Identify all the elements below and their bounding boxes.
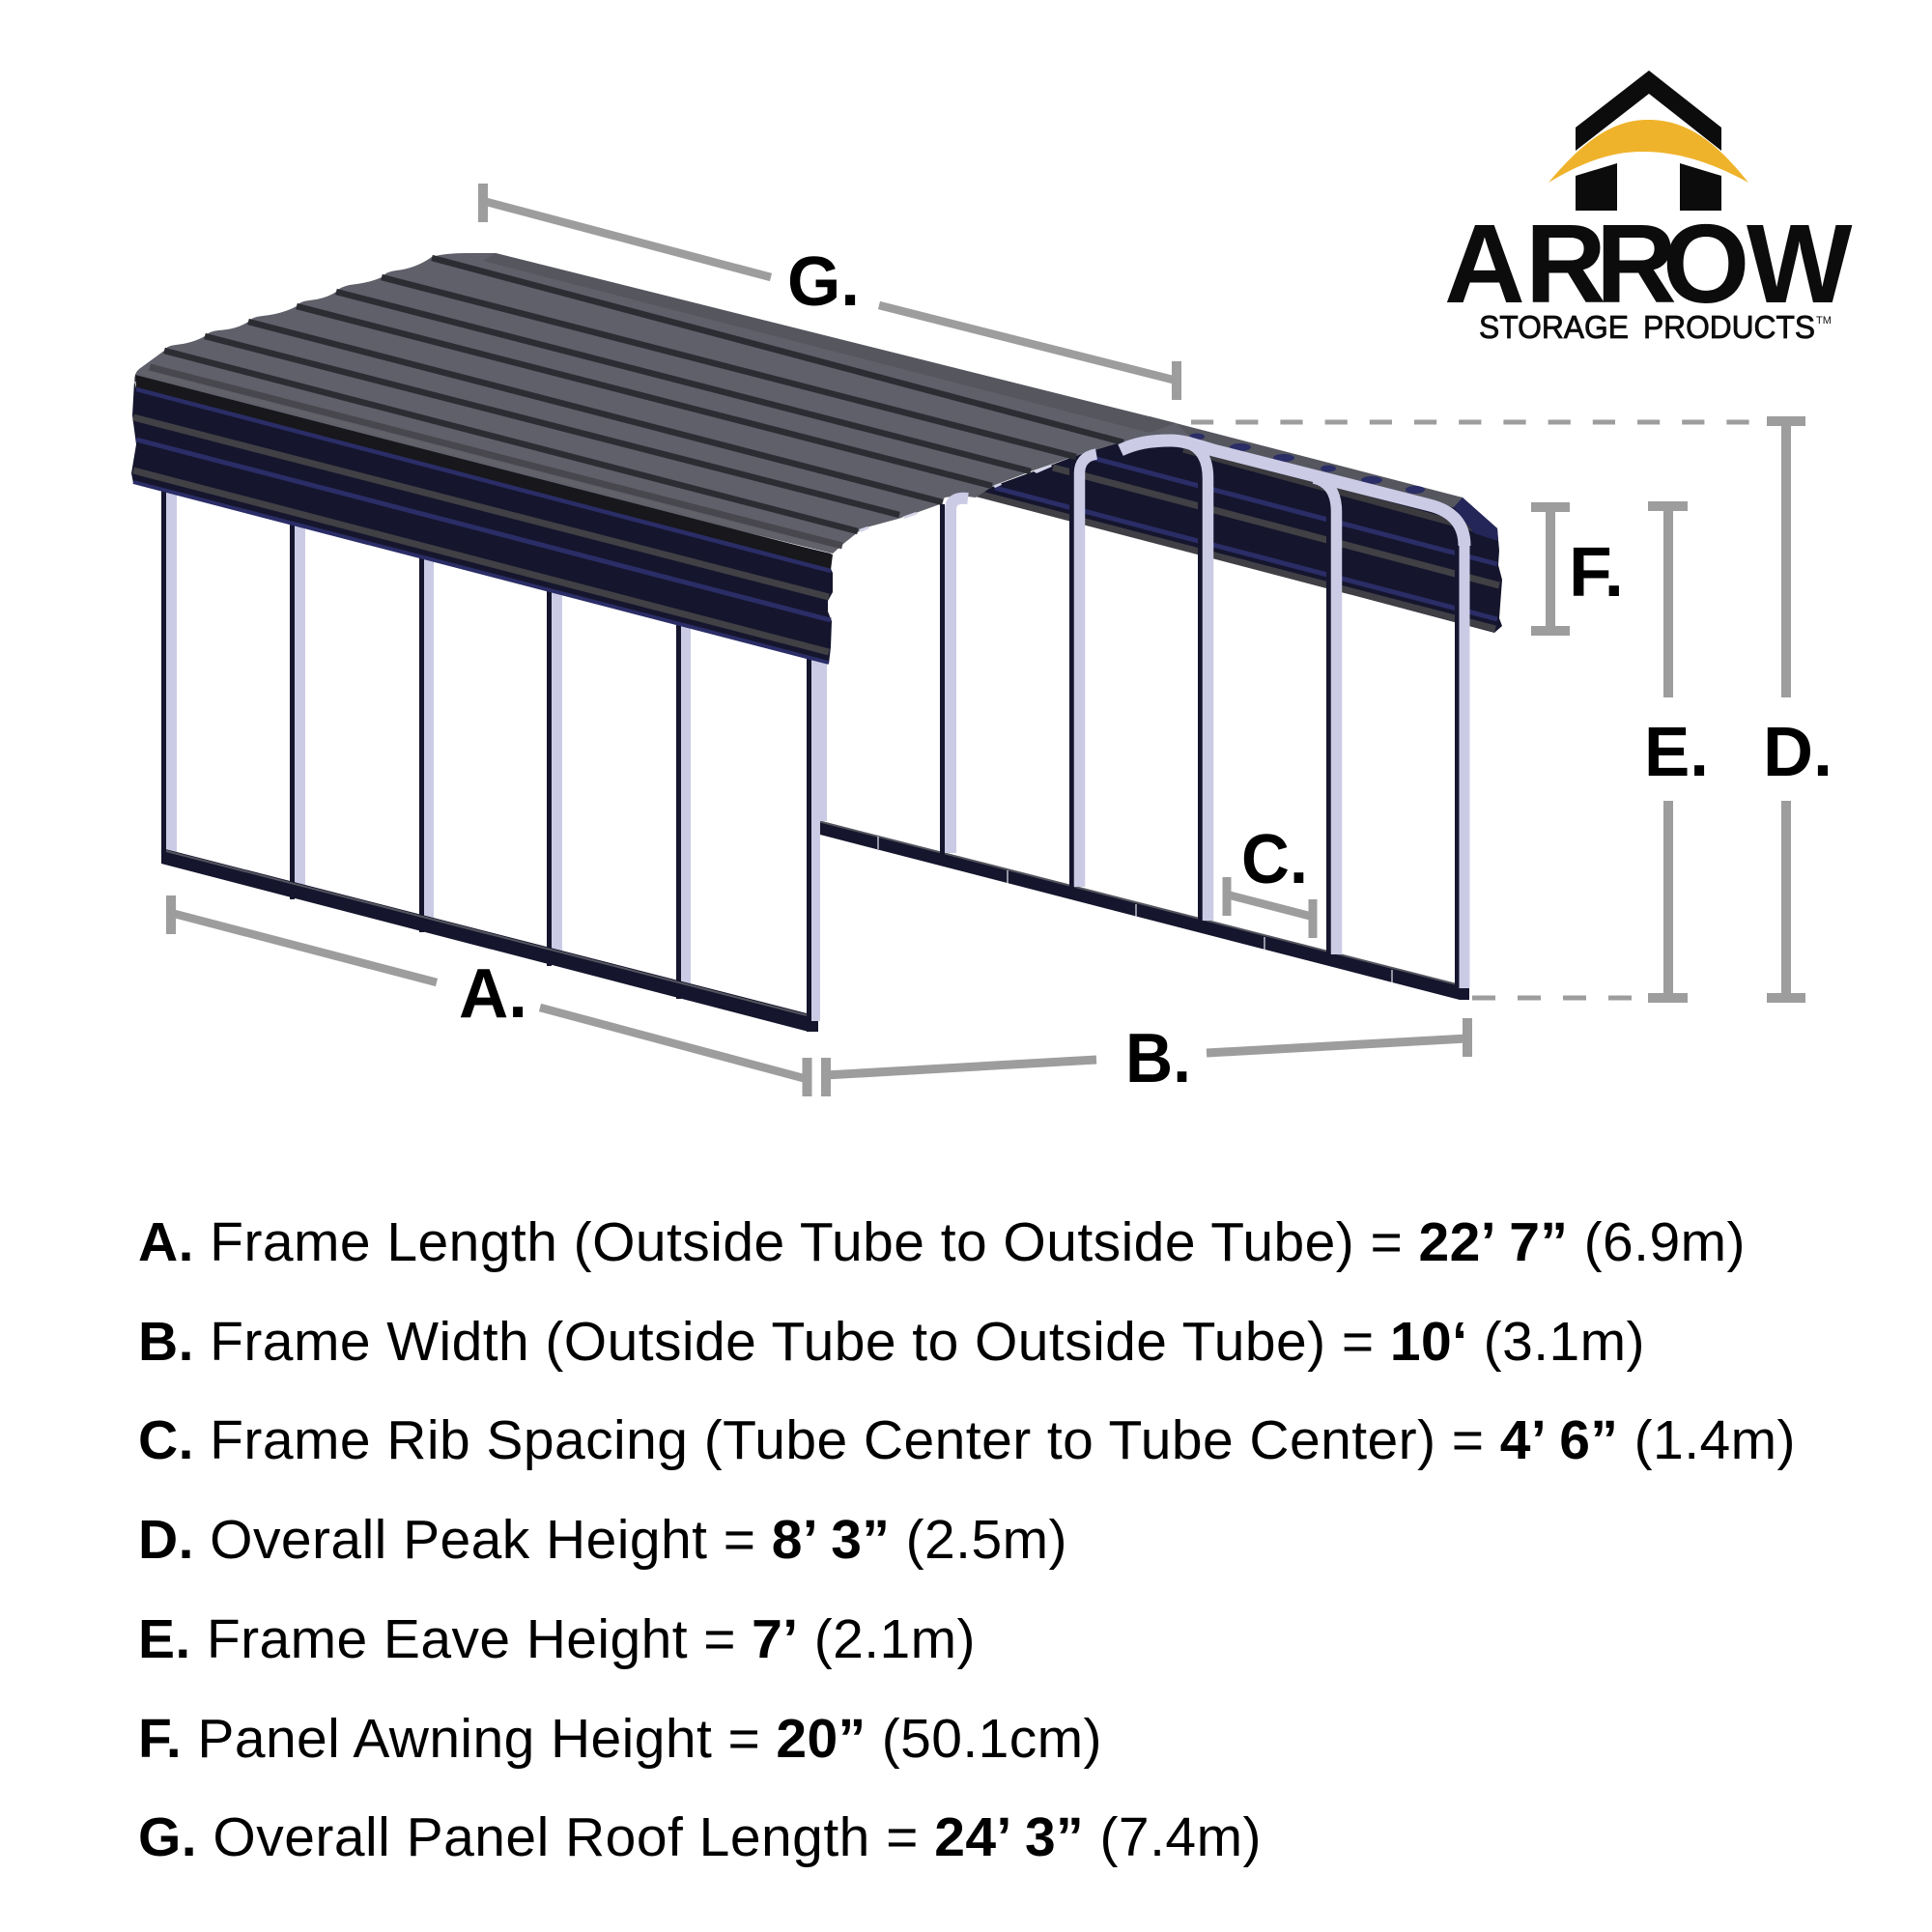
logo: Arrow Storage Products (1444, 71, 1853, 345)
spec C: C. Frame Rib Spacing (Tube Center to Tube Center) = 4’ 6” (1.4m) (138, 1409, 1795, 1471)
carport drawing (131, 253, 1502, 1032)
icon: house roof (1576, 71, 1721, 151)
icon: house left wall (1576, 163, 1617, 211)
front awning panel (131, 375, 833, 664)
icon: yellow arc (1548, 120, 1748, 183)
label G: G. (787, 243, 860, 321)
logo tagline: STORAGE (1479, 309, 1629, 345)
dimension G line (483, 184, 1177, 400)
dimension B line (826, 1018, 1467, 1096)
dashed guide bottom (1472, 995, 1657, 1001)
front sill rail (161, 848, 818, 1032)
logo trademark: TM (1816, 315, 1832, 327)
spec E: E. Frame Eave Height = 7’ (2.1m) (138, 1608, 976, 1670)
dimension D line (1767, 421, 1805, 998)
label F: F. (1569, 534, 1624, 611)
spec A: A. Frame Length (Outside Tube to Outside Tube) = 22’ 7” (6.9m) (138, 1211, 1745, 1273)
dimension F line (1531, 507, 1570, 631)
rear sill rail (820, 821, 1469, 1000)
spec F: F. Panel Awning Height = 20” (50.1cm) (138, 1708, 1101, 1770)
label B: B. (1125, 1020, 1191, 1097)
dimension A line (171, 895, 808, 1096)
corrugated roof (134, 253, 1197, 554)
label A: A. (459, 955, 527, 1033)
logo tagline (1479, 309, 1815, 345)
dimension C line (1227, 877, 1313, 938)
label C: C. (1241, 821, 1308, 898)
dashed guide top (1191, 419, 1749, 425)
spec D: D. Overall Peak Height = 8’ 3” (2.5m) (138, 1509, 1066, 1571)
roof edge flecks (859, 465, 1052, 532)
logo tagline: PRODUCTS (1643, 309, 1815, 345)
label E: E. (1644, 714, 1709, 791)
spec G: G. Overall Panel Roof Length = 24’ 3” (7.4m) (138, 1806, 1262, 1868)
specification list (138, 1211, 1795, 1868)
rear awning panel (973, 416, 1502, 633)
dimension E line (1648, 506, 1688, 998)
icon: house right wall (1680, 163, 1721, 211)
spec B: B. Frame Width (Outside Tube to Outside Tube) = 10‘ (3.1m) (138, 1311, 1644, 1373)
logo wordmark: ARROW (1444, 201, 1853, 327)
front frame posts (161, 488, 827, 1032)
label D: D. (1763, 714, 1833, 791)
rear frame ribs and arches (940, 440, 1464, 990)
